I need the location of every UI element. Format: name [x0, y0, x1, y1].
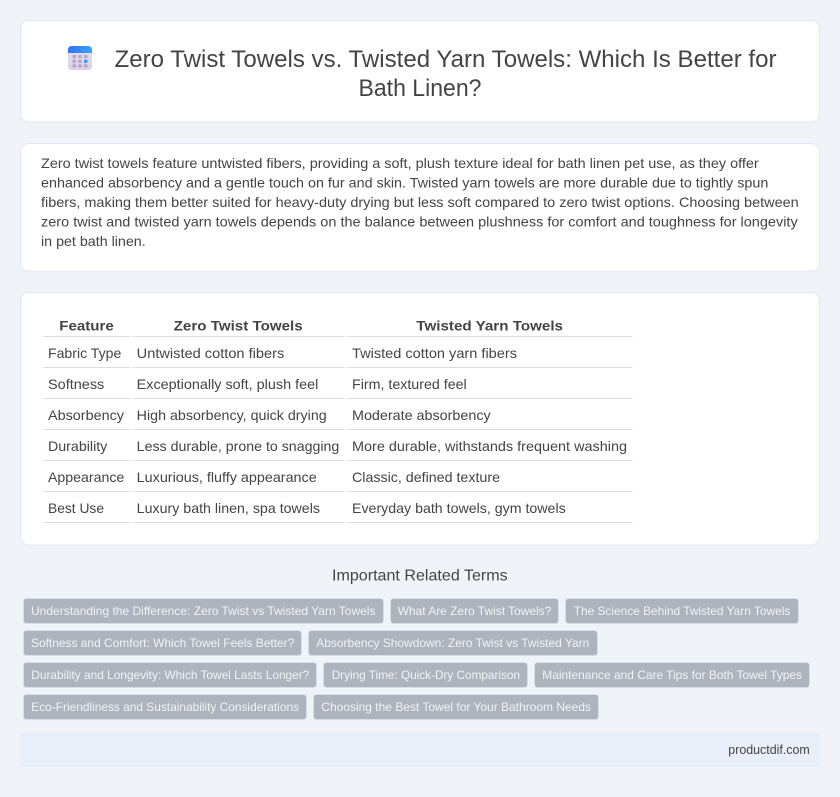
title: Zero Twist Towels vs. Twisted Yarn Towels: Which Is Better for: [114, 46, 777, 73]
table row: fabric type: Untwisted cotton fibers: [137, 345, 284, 361]
tag: what are zero twist towels: What Are Zero Twist Towels?: [398, 604, 552, 618]
title: [114, 46, 777, 102]
icon: calendar: [68, 46, 92, 70]
table row: absorbency: [43, 407, 632, 430]
footer: [20, 733, 820, 767]
text block: summary paragraph: Zero twist towels feature untwisted fibers, providing a soft, plush texture ideal for bath linen pet use, as they offer: [41, 155, 759, 171]
tag: absorbency showdown: Absorbency Showdown: Zero Twist vs Twisted Yarn: [316, 636, 589, 650]
tag: understanding the difference: Understanding the Difference: Zero Twist vs Twisted Yarn Towels: [31, 604, 376, 618]
table row: softness: Firm, textured feel: [352, 376, 467, 392]
tag: maintenance and care: Maintenance and Care Tips for Both Towel Types: [542, 668, 802, 682]
tag: durability and longevity: [24, 662, 316, 688]
table header row: Feature: [59, 318, 114, 334]
panel: comparison table: [20, 292, 820, 545]
tag: drying time: [324, 662, 528, 688]
table row: fabric type: Fabric Type: [48, 345, 122, 361]
tag: absorbency showdown: [308, 630, 598, 656]
text block: summary paragraph: fibers, making them better suited for heavy-duty drying but less soft compared to zero twist options. Choosing between: [41, 194, 799, 210]
table row: softness: Softness: [48, 376, 104, 392]
panel: header: [20, 20, 820, 122]
table row: durability: Less durable, prone to snagging: [137, 438, 339, 454]
table row: durability: [43, 438, 632, 460]
tag: drying time: Drying Time: Quick-Dry Comparison: [332, 668, 520, 682]
tag: understanding the difference: [24, 598, 384, 624]
tag: eco-friendliness: [24, 694, 306, 720]
title: Bath Linen?: [358, 75, 482, 102]
tag: maintenance and care: [534, 662, 810, 688]
text block: summary paragraph: in pet bath linen.: [41, 233, 146, 249]
tag: durability and longevity: Durability and Longevity: Which Towel Lasts Longer?: [31, 668, 310, 682]
table row: absorbency: Moderate absorbency: [352, 407, 491, 423]
table row: fabric type: Twisted cotton yarn fibers: [352, 345, 517, 361]
table row: absorbency: Absorbency: [48, 407, 124, 423]
table header row: [43, 318, 632, 336]
table row: appearance: [43, 469, 632, 492]
tag: softness and comfort: Softness and Comfort: Which Towel Feels Better?: [31, 636, 295, 650]
tag: science behind twisted yarn: The Science Behind Twisted Yarn Towels: [574, 604, 790, 618]
table row: best use: Best Use: [48, 500, 104, 516]
table row: fabric type: [43, 345, 632, 368]
table row: absorbency: High absorbency, quick drying: [137, 407, 327, 423]
table row: durability: Durability: [48, 438, 107, 454]
table row: appearance: Classic, defined texture: [352, 469, 500, 485]
table row: appearance: Appearance: [48, 469, 125, 485]
table row: best use: [43, 500, 632, 522]
text block: summary paragraph: enhanced absorbency and a gentle touch on fur and skin. Twisted yarn towels are more durable due to tightly spun: [41, 174, 768, 190]
tag: science behind twisted yarn: [566, 598, 798, 624]
text block: summary paragraph: zero twist and twisted yarn towels depends on the balance between plushness for comfort and toughness for longevity: [41, 214, 798, 230]
table row: softness: Exceptionally soft, plush feel: [137, 376, 318, 392]
table header row: Zero Twist Towels: [174, 318, 303, 334]
table row: best use: Everyday bath towels, gym towels: [352, 500, 566, 516]
table row: best use: Luxury bath linen, spa towels: [137, 500, 320, 516]
panel: summary: [20, 144, 820, 271]
table row: appearance: Luxurious, fluffy appearance: [137, 469, 317, 485]
tag: choosing the best towel: Choosing the Best Towel for Your Bathroom Needs: [321, 700, 591, 714]
table row: durability: More durable, withstands frequent washing: [352, 438, 627, 454]
tag: choosing the best towel: [314, 694, 598, 720]
table row: softness: [43, 376, 632, 398]
tag: eco-friendliness: Eco-Friendliness and Sustainability Considerations: [31, 700, 299, 714]
footer: productdif.com: [728, 743, 810, 757]
heading: related terms: Important Related Terms: [332, 568, 508, 585]
table header row: Twisted Yarn Towels: [416, 318, 563, 334]
tag: softness and comfort: [24, 630, 302, 656]
tag: what are zero twist towels: [390, 598, 558, 624]
related term tags: [24, 598, 810, 720]
text block: summary paragraph: [41, 155, 799, 249]
